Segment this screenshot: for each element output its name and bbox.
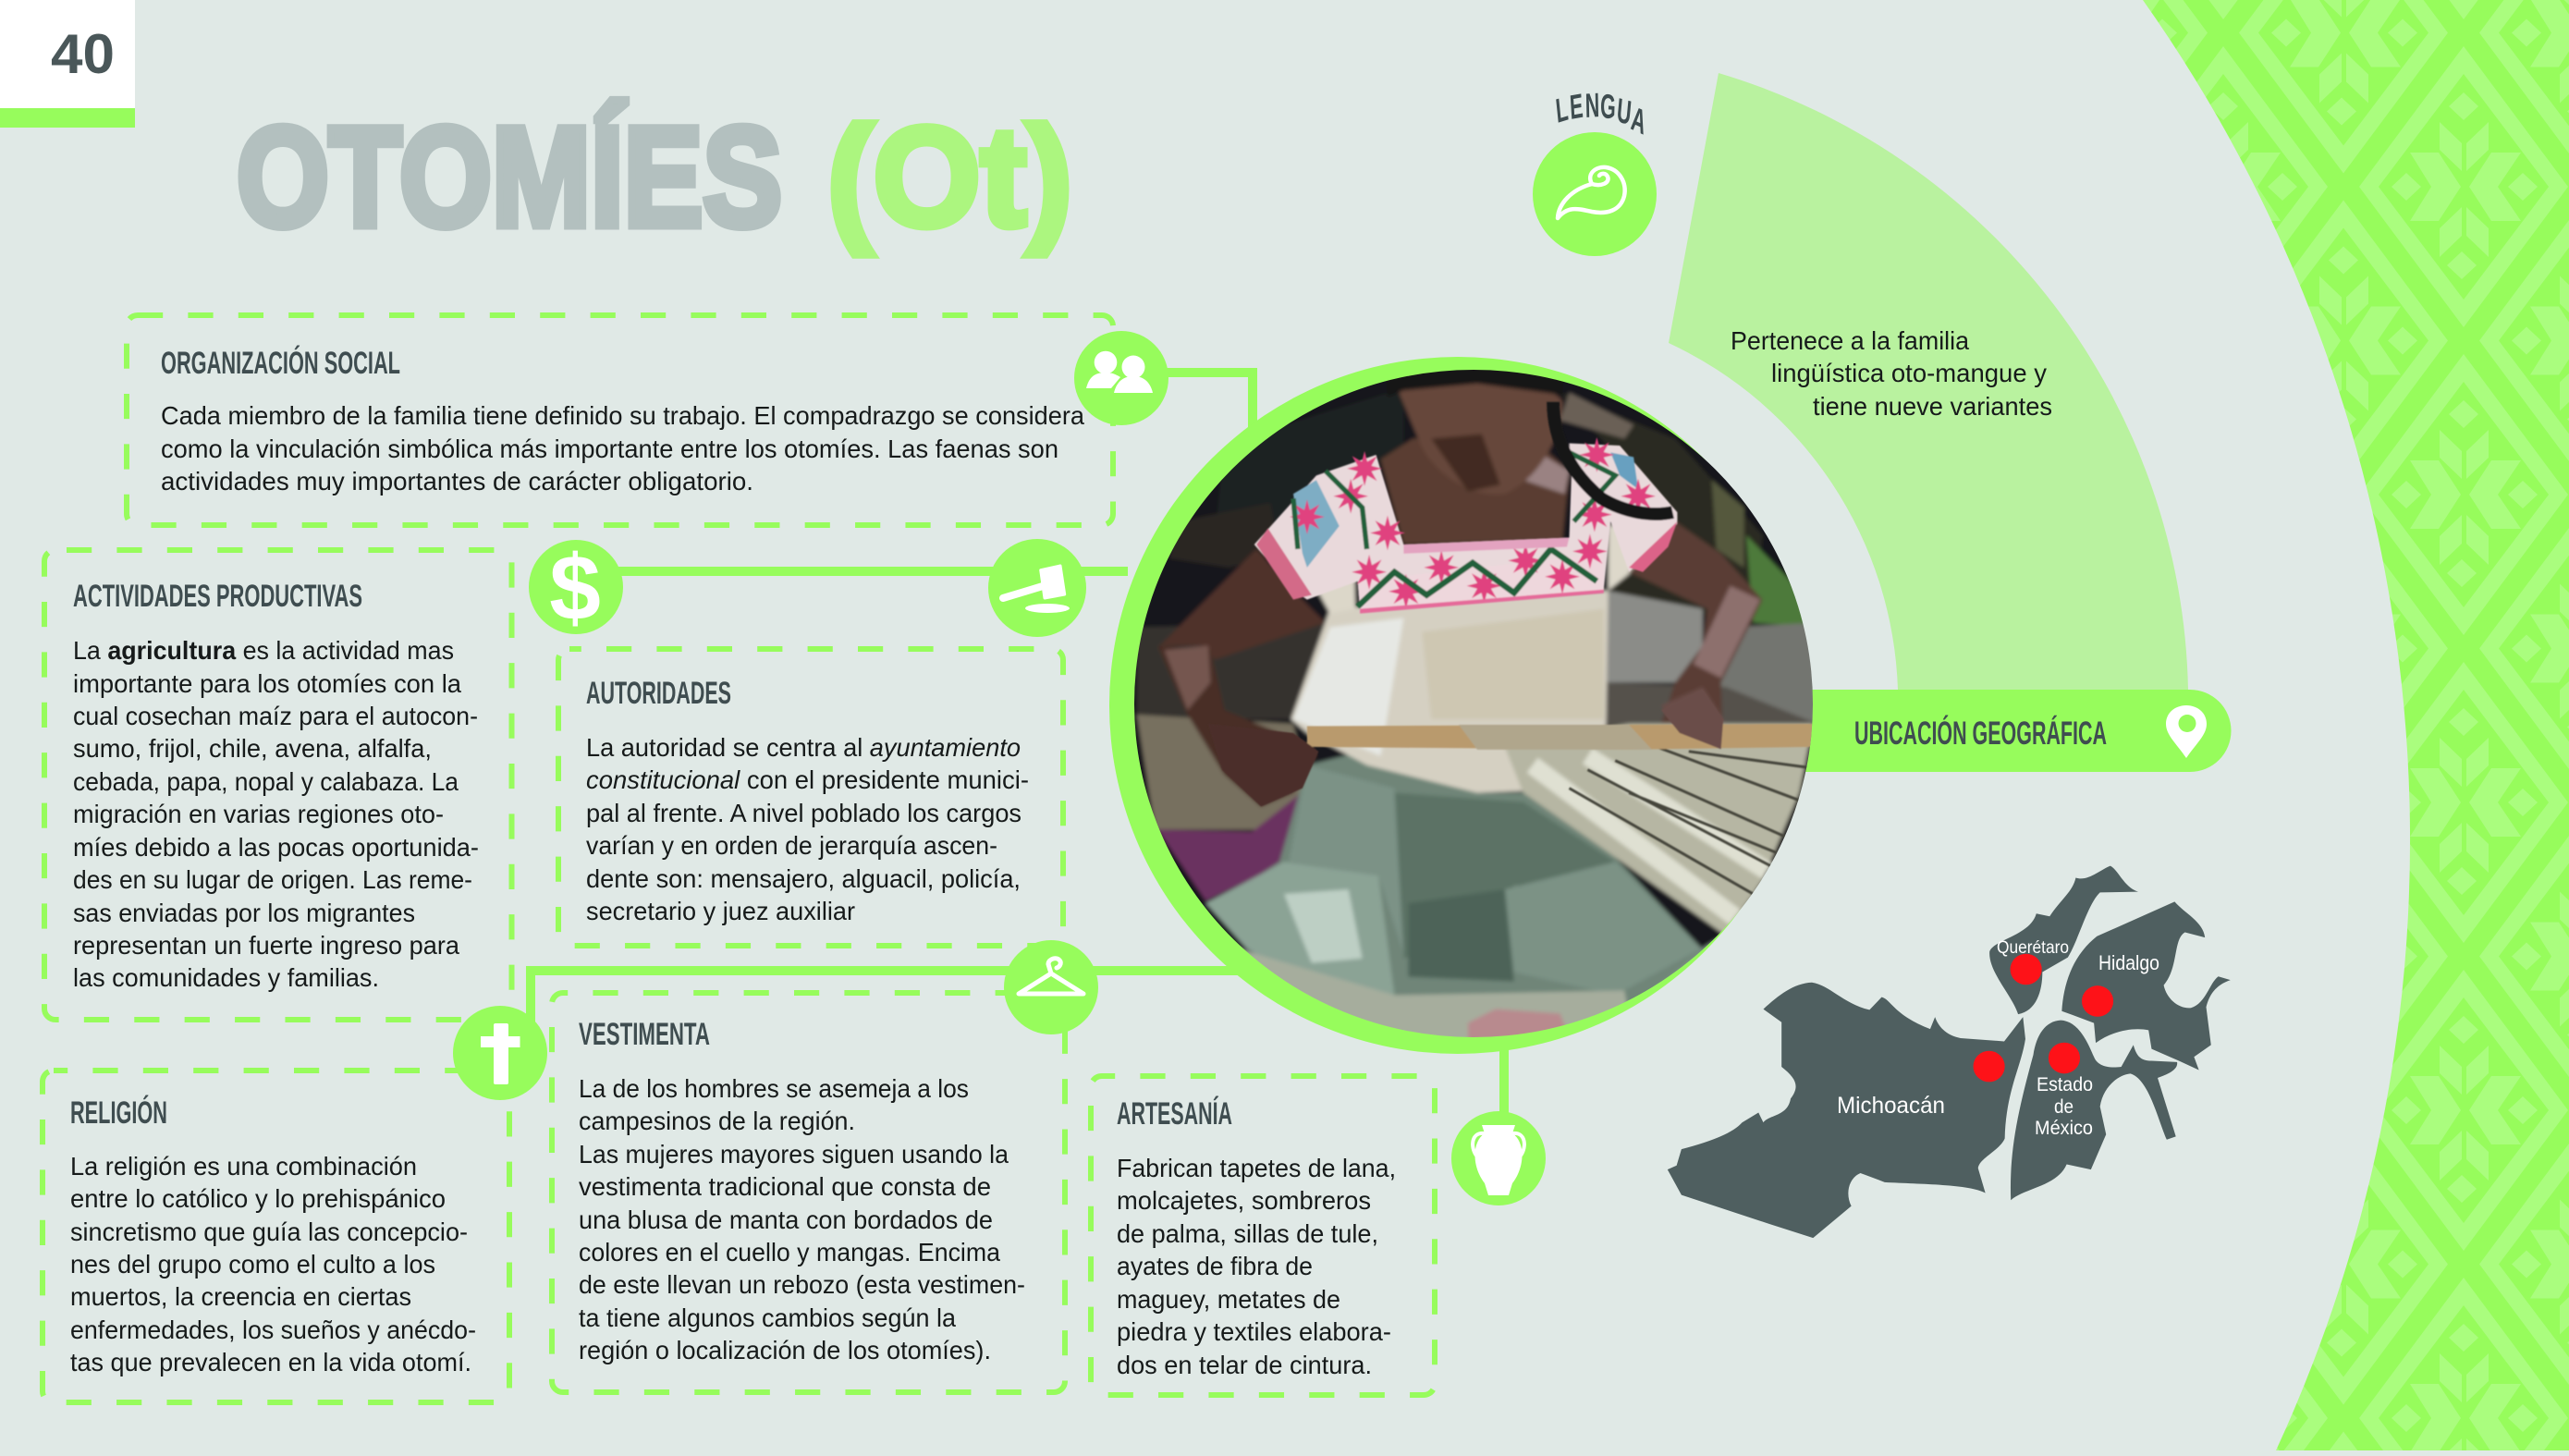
text: artesanía body: dos en telar de cintura. [1117, 1351, 1372, 1379]
text: vestimenta body: Las mujeres mayores siguen usando la [579, 1140, 1009, 1168]
text: actividades productivas body: cebada, papa, nopal y calabaza. La [73, 767, 459, 796]
map labels [1837, 938, 2159, 1139]
text: autoridades body: secretario y juez auxiliar [586, 897, 855, 925]
text: organización social body: Cada miembro de la familia tiene definido su trabajo. El compadrazgo se considera [161, 401, 1085, 430]
blouse [1291, 591, 1609, 793]
text: actividades productivas body: des en su lugar de origen. Las reme- [73, 865, 472, 894]
text: autoridades body: dente son: mensajero, alguacil, policía, [586, 864, 1021, 893]
panel: vestimenta [552, 993, 1065, 1392]
map region: Querétaro [1989, 866, 2138, 1014]
text: lengua description [1731, 326, 2052, 421]
panel: autoridades [558, 649, 1063, 946]
text: lengua description: lingüística oto-mangue y [1771, 359, 2047, 387]
arms [1160, 549, 1326, 659]
map region: Michoacán [1668, 983, 2025, 1238]
skirt [1658, 935, 1718, 984]
icon: location pin [2166, 705, 2207, 758]
text: actividades productivas body: sumo, frijol, chile, avena, alfalfa, [73, 734, 432, 763]
wall and ground [1560, 393, 1762, 627]
heading: artesanía: ARTESANÍA [1117, 1095, 1232, 1132]
map markers [1974, 954, 2113, 1082]
icon: people [1074, 331, 1168, 425]
page number tab [0, 0, 135, 128]
ubicación geográfica pill [1784, 690, 2232, 772]
text: artesanía body: ayates de fibra de [1117, 1252, 1313, 1280]
text: religión body: sincretismo que guía las concepcio- [70, 1217, 468, 1246]
text: religión body: La religión es una combinación [70, 1152, 417, 1181]
icon: dollar sign [529, 536, 623, 640]
thread streaks [1570, 747, 1808, 894]
text: actividades productivas body: importante para los otomíes con la [73, 669, 462, 698]
heading: autoridades: AUTORIDADES [586, 676, 731, 711]
heading: organización social: ORGANIZACIÓN SOCIAL [161, 344, 400, 381]
icon: cross [453, 1006, 547, 1100]
title: (Ot) [827, 98, 1072, 256]
map labels: Estado [2037, 1074, 2093, 1095]
text: actividades productivas body: sas enviadas por los migrantes [73, 899, 415, 927]
text: vestimenta body: ta tiene algunos cambios según la [579, 1303, 957, 1332]
text: religión body: nes del grupo como el culto a los [70, 1250, 435, 1279]
text: autoridades body: La autoridad se centra al ayuntamiento [586, 733, 1021, 762]
text: organización social body: como la vinculación simbólica más importante entre los otomíes. Las faenas son [161, 434, 1058, 463]
map labels: Hidalgo [2098, 951, 2159, 974]
text: autoridades body [586, 733, 1029, 925]
text: vestimenta body: La de los hombres se asemeja a los [579, 1074, 969, 1103]
embroidered yoke [1254, 444, 1677, 611]
text: vestimenta body: de este llevan un rebozo (esta vestimen- [579, 1270, 1025, 1299]
map labels: de [2054, 1096, 2074, 1118]
loom threads [1505, 724, 1813, 936]
chest and face [1381, 439, 1570, 544]
map labels: México [2035, 1118, 2093, 1139]
photo: woman weaving on a backstrap loom [1134, 370, 1813, 1037]
icon: clothes hanger [1004, 940, 1098, 1034]
text: vestimenta body: una blusa de manta con bordados de [579, 1205, 993, 1234]
icon: lengua speech ear [1533, 132, 1657, 256]
map region: Estado de México [2011, 1021, 2177, 1200]
heading: religión: RELIGIÓN [70, 1094, 167, 1131]
text: actividades productivas body: representan un fuerte ingreso para [73, 931, 460, 960]
icon: gavel [988, 539, 1086, 637]
text: organización social body: actividades muy importantes de carácter obligatorio. [161, 467, 753, 496]
text: religión body: entre lo católico y lo prehispánico [70, 1184, 446, 1213]
text: lengua description: tiene nueve variantes [1813, 392, 2052, 421]
icon: dollar sign: $ [549, 536, 601, 640]
panel: actividades productivas [44, 550, 512, 1020]
purple cloth [1159, 797, 1298, 902]
panel: religión [43, 1071, 509, 1402]
text: actividades productivas body: La agricultura es la actividad mas [73, 636, 454, 665]
icon: clay jar [1451, 1111, 1546, 1205]
map: states of the otomí region [1668, 866, 2231, 1238]
text: religión body [70, 1152, 476, 1376]
text: vestimenta body: colores en el cuello y mangas. Encima [579, 1238, 1001, 1266]
text: vestimenta body: campesinos de la región. [579, 1107, 855, 1135]
text: artesanía body: piedra y textiles elabora- [1117, 1317, 1391, 1346]
text: actividades productivas body: cual cosechan maíz para el autocon- [73, 702, 478, 730]
heading: lengua curved: LENGUA [1554, 87, 1648, 142]
map labels: Michoacán [1837, 1093, 1945, 1119]
text: actividades productivas body [73, 636, 479, 992]
text: actividades productivas body: míes debido a las pocas oportunida- [73, 833, 479, 862]
connector lines [531, 373, 1504, 1158]
panel: artesanía [1091, 1076, 1435, 1395]
text: religión body: enfermedades, los sueños y anécdo- [70, 1315, 476, 1344]
panel: lengua arc [1669, 73, 2188, 690]
page number tab: 40 [51, 23, 115, 85]
text: vestimenta body [579, 1074, 1025, 1364]
text: actividades productivas body: migración en varias regiones oto- [73, 800, 444, 828]
photo ring [1109, 357, 1806, 1054]
left hand [1208, 724, 1318, 807]
heading: vestimenta: VESTIMENTA [579, 1017, 710, 1052]
text: artesanía body: maguey, metates de [1117, 1285, 1340, 1314]
text: actividades productivas body: las comunidades y familias. [73, 963, 379, 992]
map region: Hidalgo [2061, 901, 2231, 1070]
panel: organización social [127, 315, 1113, 525]
text: artesanía body: de palma, sillas de tule, [1117, 1219, 1378, 1248]
text: artesanía body: molcajetes, sombreros [1117, 1186, 1371, 1215]
ubicación geográfica pill: UBICACIÓN GEOGRÁFICA [1854, 715, 2107, 752]
title: OTOMÍES [237, 98, 782, 256]
text: organización social body [161, 401, 1085, 496]
heading: actividades productivas: ACTIVIDADES PRODUCTIVAS [73, 579, 362, 614]
text: vestimenta body: región o localización de los otomíes). [579, 1336, 991, 1364]
text: religión body: muertos, la creencia en ciertas [70, 1282, 411, 1311]
text: autoridades body: varían y en orden de jerarquía ascen- [586, 831, 997, 860]
text: autoridades body: pal al frente. A nivel poblado los cargos [586, 799, 1021, 827]
text: religión body: tas que prevalecen en la vida otomí. [70, 1348, 471, 1376]
loom stick [1307, 724, 1813, 750]
map labels: Querétaro [1997, 938, 2069, 958]
text: lengua description: Pertenece a la familia [1731, 326, 1970, 355]
text: artesanía body [1117, 1154, 1396, 1379]
text: autoridades body: constitucional con el presidente munici- [586, 765, 1029, 794]
braid [1553, 402, 1672, 514]
text: artesanía body: Fabrican tapetes de lana, [1117, 1154, 1396, 1182]
text: vestimenta body: vestimenta tradicional que consta de [579, 1172, 991, 1201]
